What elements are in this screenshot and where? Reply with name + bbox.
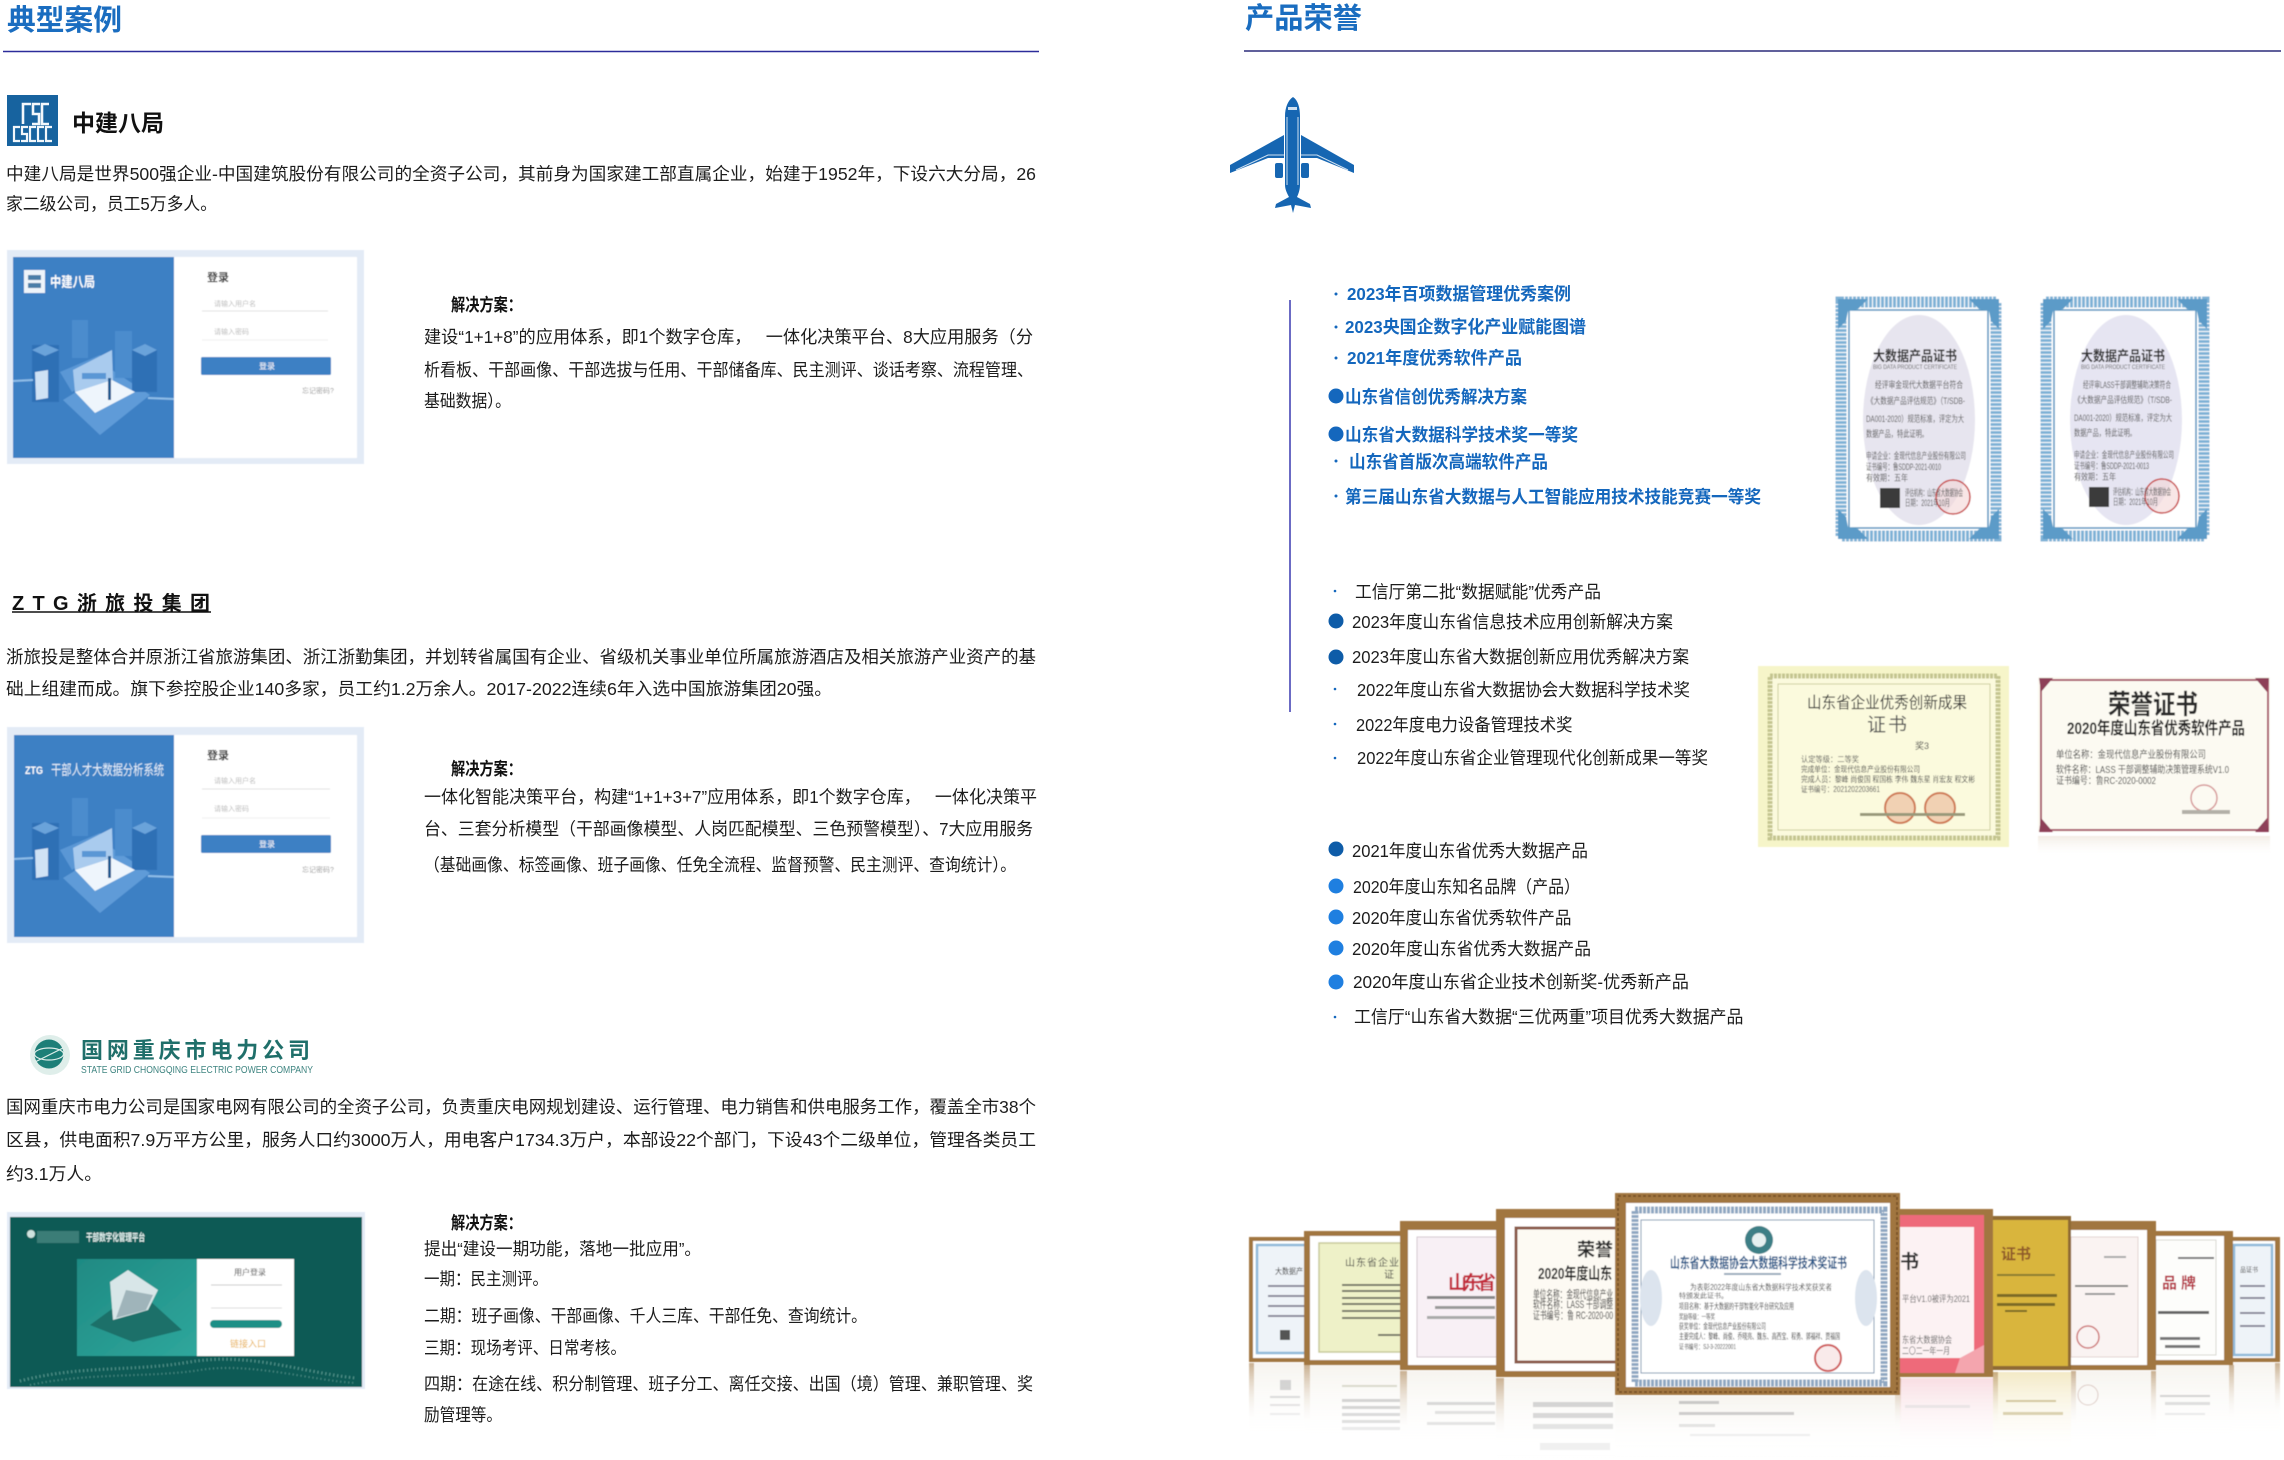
frame: right 1 pink: 书 (1900, 1251, 1919, 1273)
screenshot: CSCEC login: 登录 (259, 361, 275, 371)
solution text: （基础画像、标签画像、班子画像、任免全流程、监督预警、民主测评、查询统计）。 (424, 855, 1016, 875)
screenshot: CSCEC login: 忘记密码? (302, 386, 334, 395)
case: ZTG (6, 592, 1037, 943)
certificate: big data product 1 (1835, 296, 2002, 542)
list: black honors (1328, 582, 1744, 1027)
screenshot: ZTG login: 干部人才大数据分析系统 (51, 762, 164, 778)
certificate wall (1249, 1193, 2280, 1458)
certificate: big data product 1: 证书编号：鲁SDDP-2021-0010 (1866, 461, 1941, 472)
company description: 约3.1万人。 (6, 1164, 102, 1184)
screenshot: ZTG login (7, 727, 364, 943)
honor item: 山东省大数据科学技术奖一等奖 (1345, 425, 1578, 445)
frame: left 2 (1399, 1220, 1497, 1371)
solution text: 四期：在途在线、积分制管理、班子分工、离任交接、出国（境）管理、兼职管理、奖 (424, 1374, 1033, 1394)
certificate: big data product 2: 评估机构：山东省大数据协会 (2113, 486, 2171, 497)
solution text: 建设“1+1+8”的应用体系，即1个数字仓库， 一体化决策平台、8大应用服务（分 (424, 327, 1033, 347)
company description (6, 647, 1036, 699)
frame: center certificate: 获奖单位：金现代信息产业股份有限公司 (1679, 1321, 1766, 1331)
frame: center certificate: 奖励等级：一等奖 (1679, 1312, 1715, 1321)
honor item: 2023年度山东省信息技术应用创新解决方案 (1352, 612, 1673, 632)
frame: right 1 pink: 东省大数据协会 (1902, 1334, 1952, 1345)
solution text: 励管理等。 (424, 1405, 502, 1425)
certificate: big data product 1: 《大数据产品评估规范》（T/SDB- (1867, 395, 1965, 406)
certificate: big data product 1: 申请企业：金现代信息产业股份有限公司 (1866, 450, 1966, 461)
icon: State Grid logo (30, 1035, 70, 1075)
frame: right 1 pink: 平台V1.0被评为2021 (1902, 1293, 1970, 1304)
certificate: enterprise innovation: 奖3 (1915, 740, 1929, 751)
honor item: 山东省首版次高端软件产品 (1349, 452, 1548, 472)
certificate: big data product 2: DA001-2020）规范标准，评定为大 (2074, 412, 2172, 423)
honor item: 2022年度电力设备管理技术奖 (1356, 715, 1572, 735)
certificate: big data product 2: 有效期：五年 (2074, 471, 2116, 482)
certificate: enterprise innovation: 证书编号：2021202203661 (1801, 784, 1880, 794)
list: blue honors (1328, 284, 1761, 507)
solution text: 提出“建设一期功能，落地一批应用”。 (424, 1239, 701, 1259)
company description: 浙旅投是整体合并原浙江省旅游集团、浙江浙勤集团，并划转省属国有企业、省级机关事业单位所属旅游酒店及相关旅游产业资产的基 (6, 647, 1036, 667)
company description: 家二级公司，员工5万多人。 (6, 194, 217, 214)
company description: 区县，供电面积7.9万平方公里，服务人口约3000万人，用电客户1734.3万户，本部设22个部门，下设43个二级单位，管理各类员工 (6, 1130, 1036, 1150)
honor item: 工信厅“山东省大数据“三优两重”项目优秀大数据产品 (1354, 1007, 1744, 1027)
screenshot: State Grid platform: 用户登录 (234, 1267, 266, 1277)
frame: center certificate (1615, 1193, 1900, 1395)
certificate: big data product 1: 大数据产品证书 (1873, 348, 1957, 364)
frame: left 1: 软件名称：LASS 干部调整 (1533, 1297, 1613, 1311)
frame: left 1 (1495, 1208, 1616, 1378)
frame: left 1: 荣誉 (1577, 1240, 1613, 1260)
solution text: 三期：现场考评、日常考核。 (424, 1338, 626, 1358)
certificate: enterprise innovation: 山东省企业优秀创新成果 (1807, 694, 1967, 712)
certificate: big data product 1: 有效期：五年 (1866, 472, 1908, 483)
honor item: 工信厅第二批“数据赋能”优秀产品 (1355, 582, 1601, 602)
honor item: 2023年度山东省大数据创新应用优秀解决方案 (1352, 647, 1689, 667)
screenshot: ZTG login: 忘记密码? (302, 865, 334, 874)
certificate: big data product 2: 申请企业：金现代信息产业股份有限公司 (2074, 449, 2174, 460)
certificate: big data product 1: 经评审金现代大数据平台符合 (1875, 379, 1963, 390)
frame: left 1: 证书编号：鲁 RC-2020-00 (1533, 1308, 1613, 1322)
wall reflection (1249, 1363, 2280, 1458)
frame: left 2: 山东省 (1448, 1271, 1496, 1294)
frame: gold: 证书 (2001, 1246, 2031, 1263)
solution text: 基础数据）。 (424, 391, 511, 411)
frame: center certificate: 特颁发此证书。 (1679, 1291, 1728, 1300)
company description: 国网重庆市电力公司是国家电网有限公司的全资子公司，负责重庆电网规划建设、运行管理、电力销售和供电服务工作，覆盖全市38个 (6, 1097, 1036, 1117)
honor item: 2021年度优秀软件产品 (1347, 348, 1522, 368)
icon: CSCEC logo (7, 95, 58, 146)
certificate: excellent software product: 证书编号：鲁RC-2020-0002 (2056, 774, 2156, 787)
company description: 础上组建而成。旗下参控股企业140多家，员工约1.2万余人。2017-2022连续6年入选中国旅游集团20强。 (6, 679, 832, 699)
panel: typical cases (3, 4, 1039, 1425)
frame: right 4 (2155, 1230, 2234, 1366)
honor item: 山东省信创优秀解决方案 (1345, 387, 1527, 407)
solution text: 解决方案： (451, 759, 522, 779)
screenshot: CSCEC login: 中建八局 (50, 274, 95, 290)
frame: right 4: 品牌 (2162, 1275, 2196, 1292)
certificate: big data product 2: 数据产品，特此证明。 (2074, 427, 2136, 438)
company name: ZTG: ZTG浙旅投集团 (12, 592, 210, 615)
honor item: 2020年度山东省优秀软件产品 (1352, 908, 1572, 928)
frame: right 1 pink: 二〇二一年一月 (1902, 1345, 1950, 1356)
case: CSCEC (6, 95, 1036, 464)
frame: left 3: 山东省企业优秀 (1345, 1256, 1422, 1269)
frame: gold (1992, 1215, 2072, 1371)
honor item: 2022年度山东省大数据协会大数据科学技术奖 (1357, 680, 1690, 700)
solution text: 解决方案： (451, 1213, 522, 1233)
certificate: big data product 1: DA001-2020）规范标准，评定为大 (1866, 413, 1964, 424)
solution text: 二期：班子画像、干部画像、千人三库、干部任免、查询统计。 (424, 1306, 867, 1326)
certificate: enterprise innovation: 完成单位：金现代信息产业股份有限公司 (1801, 764, 1920, 774)
frame: far right: 品证书 (2240, 1265, 2258, 1274)
screenshot: State Grid platform: 链接入口 (230, 1338, 266, 1349)
honor item: 2023年百项数据管理优秀案例 (1347, 284, 1571, 304)
certificate: big data product 2: 证书编号：鲁SDDP-2021-0013 (2074, 460, 2149, 471)
certificate: big data product 2: 经评审LASS干部调整辅助决策符合 (2083, 379, 2171, 390)
frame: far right (2232, 1236, 2281, 1363)
heading: typical cases: 典型案例 (7, 4, 122, 37)
solution text: 解决方案： (451, 295, 522, 315)
screenshot: ZTG login: ZTG (25, 765, 43, 777)
frame: far left: 大数据产 (1275, 1266, 1303, 1276)
frame: left 3 (1303, 1230, 1401, 1366)
certificate: big data product 2 (2040, 296, 2210, 542)
certificate: enterprise innovation: 证书 (1867, 714, 1907, 736)
screenshot: State Grid platform (7, 1212, 365, 1389)
company name: CSCEC 8: 中建八局 (72, 110, 164, 136)
frame: center certificate: 证书编号：SJ-3-20222001 (1679, 1342, 1736, 1351)
screenshot: CSCEC login: 登录 (207, 270, 229, 284)
certificate: excellent software product: 荣誉证书 (2108, 690, 2198, 720)
company description (6, 1097, 1036, 1184)
heading: product honors: 产品荣誉 (1245, 2, 1362, 35)
solution text (424, 759, 1037, 875)
company description: 中建八局是世界500强企业-中国建筑股份有限公司的全资子公司，其前身为国家建工部直属企业，始建于1952年，下设六大分局，26 (6, 164, 1036, 184)
solution text: 一期：民主测评。 (424, 1269, 548, 1289)
certificate: enterprise innovation (1758, 666, 2009, 847)
screenshot: ZTG login: 请输入用户名 (214, 776, 256, 785)
screenshot: ZTG login: 登录 (207, 748, 229, 762)
frame: center certificate: 项目名称：基于大数据的干部智能化平台研究及应用 (1679, 1301, 1794, 1311)
frame: left 1: 2020年度山东 (1538, 1264, 1612, 1283)
company name: State Grid Chongqing: STATE GRID CHONGQING ELECTRIC POWER COMPANY (81, 1065, 313, 1076)
certificate: enterprise innovation: 完成人员：黎峰 尚俊国 程国栋 李伟 魏东星 肖宏友 程文彬 (1801, 774, 1975, 784)
honor item: 2020年度山东省优秀大数据产品 (1352, 939, 1591, 959)
solution text: 台、三套分析模型（干部画像模型、人岗匹配模型、三色预警模型）、7大应用服务 (424, 819, 1033, 839)
screenshot: CSCEC login: 请输入用户名 (214, 299, 256, 308)
frame: left 1: 单位名称：金现代信息产业 (1533, 1287, 1613, 1301)
honor item: 第三届山东省大数据与人工智能应用技术技能竞赛一等奖 (1345, 487, 1761, 507)
frame: center certificate: 山东省大数据协会大数据科学技术奖证书 (1670, 1255, 1847, 1271)
solution text: 一体化智能决策平台，构建“1+1+3+7”应用体系，即1个数字仓库， 一体化决策平 (424, 787, 1037, 807)
timeline line (1289, 300, 1291, 712)
honor item: 2020年度山东省企业技术创新奖-优秀新产品 (1353, 972, 1689, 992)
certificate: enterprise innovation: 认定等级：二等奖 (1801, 754, 1859, 764)
company name: State Grid Chongqing: 国网重庆市电力公司 (81, 1038, 310, 1063)
screenshot: ZTG login: 请输入密码 (214, 804, 249, 813)
icon: airplane (1230, 97, 1354, 213)
frame: center certificate: 主要完成人：黎峰、尚俊、乔晓亮、魏东、高西宝、程勇、郭福祥、贾福国 (1679, 1331, 1840, 1341)
frame: right 3 (2070, 1220, 2157, 1371)
honor item: 2023央国企数字化产业赋能图谱 (1345, 317, 1586, 337)
solution text: 析看板、干部画像、干部选拔与任用、干部储备库、民主测评、谈话考察、流程管理、 (424, 360, 1033, 380)
certificate: big data product 1: BIG DATA PRODUCT CERTIFICATE (1873, 365, 1957, 371)
company description (6, 164, 1036, 214)
honor item: 2020年度山东知名品牌（产品） (1353, 877, 1580, 897)
screenshot: CSCEC login (7, 250, 364, 464)
certificate: big data product 2: 《大数据产品评估规范》（T/SDB- (2074, 394, 2172, 405)
screenshot: State Grid platform: 干部数字化管理平台 (86, 1231, 145, 1244)
honor item: 2021年度山东省优秀大数据产品 (1352, 841, 1588, 861)
panel: product honors (1230, 2, 2281, 1458)
company name: State Grid Chongqing (81, 1038, 313, 1076)
certificate: big data product 1: 数据产品，特此证明。 (1866, 428, 1928, 439)
certificate: big data product 2: 日期：2021年10月 (2113, 496, 2158, 507)
certificate: excellent software product: 软件名称：LASS 干部调整辅助决策管理系统V1.0 (2056, 763, 2229, 776)
frame: right 1 pink (1899, 1208, 1994, 1378)
certificate: big data product 2: 大数据产品证书 (2081, 348, 2165, 364)
frame: far left (1249, 1237, 1329, 1362)
certificate: big data product 1: 评估机构：山东省大数据协会 (1905, 487, 1963, 498)
certificate: excellent software product: 单位名称：金现代信息产业股份有限公司 (2056, 748, 2206, 761)
solution text (424, 295, 1033, 411)
case: State Grid Chongqing (6, 1035, 1036, 1425)
honor item: 2022年度山东省企业管理现代化创新成果一等奖 (1357, 748, 1708, 768)
screenshot: ZTG login: 登录 (259, 839, 275, 849)
certificate: big data product 2: BIG DATA PRODUCT CERTIFICATE (2081, 365, 2165, 371)
certificate: big data product 1: 日期：2021年10月 (1905, 497, 1950, 508)
frame: center certificate: 为表彰2022年度山东省大数据科学技术奖获奖者 (1690, 1282, 1832, 1292)
frame: left 3: 证 (1384, 1269, 1394, 1281)
certificate: excellent software product (2038, 677, 2270, 857)
solution text (424, 1213, 1033, 1425)
screenshot: CSCEC login: 请输入密码 (214, 327, 249, 336)
